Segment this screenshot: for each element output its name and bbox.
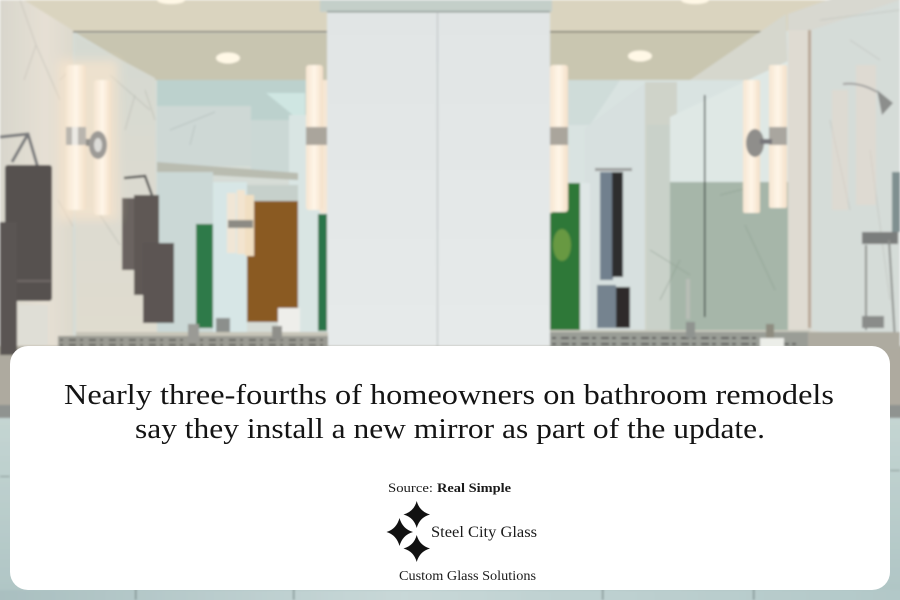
logo name: Steel City Glass <box>431 524 537 541</box>
granite counter <box>58 322 900 350</box>
reflected windows <box>196 224 213 328</box>
tagline: Custom Glass Solutions <box>399 569 536 584</box>
logo: three sparkle stars <box>386 501 430 562</box>
reflected window <box>549 183 580 330</box>
left wall sconce <box>66 65 111 215</box>
left mirror <box>73 31 330 336</box>
source line <box>388 480 511 495</box>
mirror sconce reflection left of column <box>306 65 329 213</box>
right mirror <box>547 14 790 332</box>
source line: Source: <box>388 480 433 495</box>
ceiling <box>0 0 900 40</box>
recessed ceiling lights <box>157 0 709 64</box>
source line: Real Simple <box>437 480 511 495</box>
towel bar and towels <box>0 134 52 355</box>
reflected shower glass <box>670 60 790 182</box>
headline text <box>64 379 834 445</box>
reflected door <box>247 201 298 322</box>
vanity and floor behind the panel <box>0 346 900 600</box>
reflected towels <box>600 172 613 280</box>
lamp glow on left wall <box>58 60 118 220</box>
lower left towel edge <box>0 340 17 355</box>
right sconce in mirror <box>743 65 787 213</box>
white text panel <box>10 346 890 590</box>
right wall and shower <box>788 0 900 346</box>
mirror sconce reflection right of column <box>546 65 568 213</box>
reflected lamps <box>227 193 236 253</box>
left marble wall <box>0 0 76 346</box>
mirror towels <box>122 198 134 270</box>
column <box>320 0 552 348</box>
headline text: Nearly three-fourths of homeowners on bathroom remodels <box>64 379 834 411</box>
headline text: say they install a new mirror as part of the update. <box>135 413 765 445</box>
